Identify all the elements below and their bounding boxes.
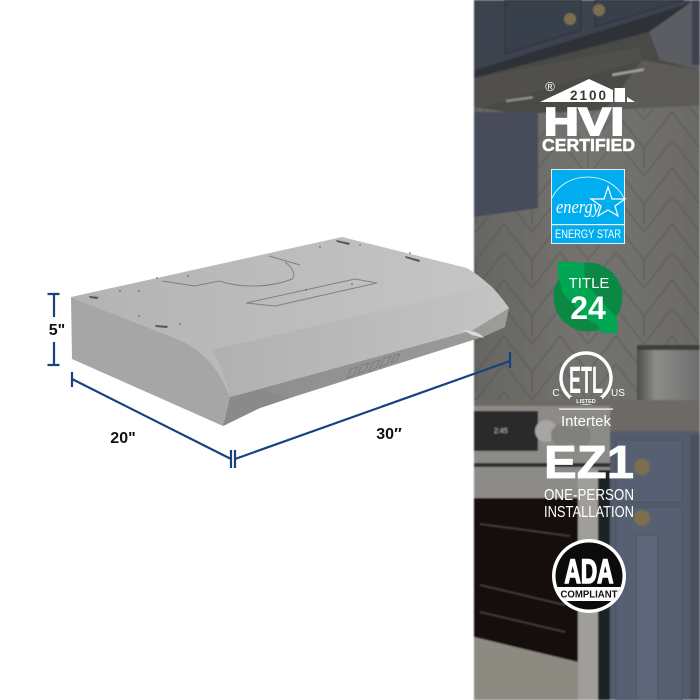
lower right cabinets bbox=[610, 431, 700, 700]
hood lower lip bbox=[223, 308, 509, 426]
badge: EZ1 one-person installation: ONE-PERSON bbox=[544, 487, 634, 504]
badge: ETL listed Intertek: US bbox=[611, 388, 625, 399]
hood front curved face bbox=[212, 285, 509, 397]
dimension: width 30 inches bbox=[235, 352, 510, 468]
countertop bbox=[474, 400, 700, 432]
kitchen photo background bbox=[474, 0, 700, 700]
badge: ETL listed Intertek bbox=[552, 353, 625, 430]
badge: HVI certified bbox=[540, 79, 635, 155]
range hood product bbox=[71, 237, 509, 426]
badge: ETL listed Intertek: C bbox=[552, 388, 560, 399]
hood side panel bbox=[71, 297, 230, 426]
badge: Title 24: TITLE bbox=[569, 275, 609, 292]
badge: ETL listed Intertek: ETL bbox=[569, 360, 603, 402]
range hood in photo bbox=[474, 3, 700, 114]
dimension: depth 20 inches: 20" bbox=[110, 430, 136, 447]
range oven: 2:45 bbox=[494, 428, 508, 435]
badge: EZ1 one-person installation: INSTALLATION bbox=[544, 504, 634, 521]
dimension: height 5 inches: 5" bbox=[49, 322, 65, 339]
badge: EZ1 one-person installation bbox=[544, 436, 634, 521]
badge: ADA compliant: COMPLIANT bbox=[560, 590, 618, 600]
badge: ETL listed Intertek: LISTED bbox=[576, 399, 596, 405]
badge: ADA compliant bbox=[552, 539, 626, 613]
badge: Energy Star: energy bbox=[556, 197, 600, 218]
badge: ETL listed Intertek: Intertek bbox=[561, 413, 612, 430]
badge: HVI certified: ® bbox=[545, 79, 555, 94]
badge: HVI certified: HVI bbox=[544, 101, 624, 144]
dimension: depth 20 inches bbox=[72, 372, 231, 468]
dimension: height 5 inches bbox=[48, 294, 65, 365]
badge: Energy Star bbox=[552, 170, 625, 244]
badge: Title 24 bbox=[554, 261, 622, 333]
badge: Energy Star: ENERGY STAR bbox=[555, 229, 621, 241]
badge: EZ1 one-person installation: EZ1 bbox=[544, 436, 634, 488]
range oven bbox=[474, 406, 610, 700]
right wall beside hood bbox=[640, 0, 700, 80]
badge: Title 24: 24 bbox=[570, 290, 606, 326]
pot bbox=[637, 346, 700, 402]
lower left wall cabinet bbox=[474, 112, 538, 217]
top panel details bbox=[162, 256, 377, 306]
hood control buttons bbox=[347, 354, 400, 378]
badge: HVI certified: CERTIFIED bbox=[542, 135, 635, 155]
badge: ADA compliant: ADA bbox=[564, 553, 614, 591]
upper cabinets bbox=[474, 0, 700, 70]
tile wall bbox=[474, 100, 700, 410]
dimension: width 30 inches: 30″ bbox=[376, 426, 402, 443]
hood top and front face bbox=[71, 237, 509, 397]
badge: HVI certified: 2100 bbox=[570, 88, 608, 103]
